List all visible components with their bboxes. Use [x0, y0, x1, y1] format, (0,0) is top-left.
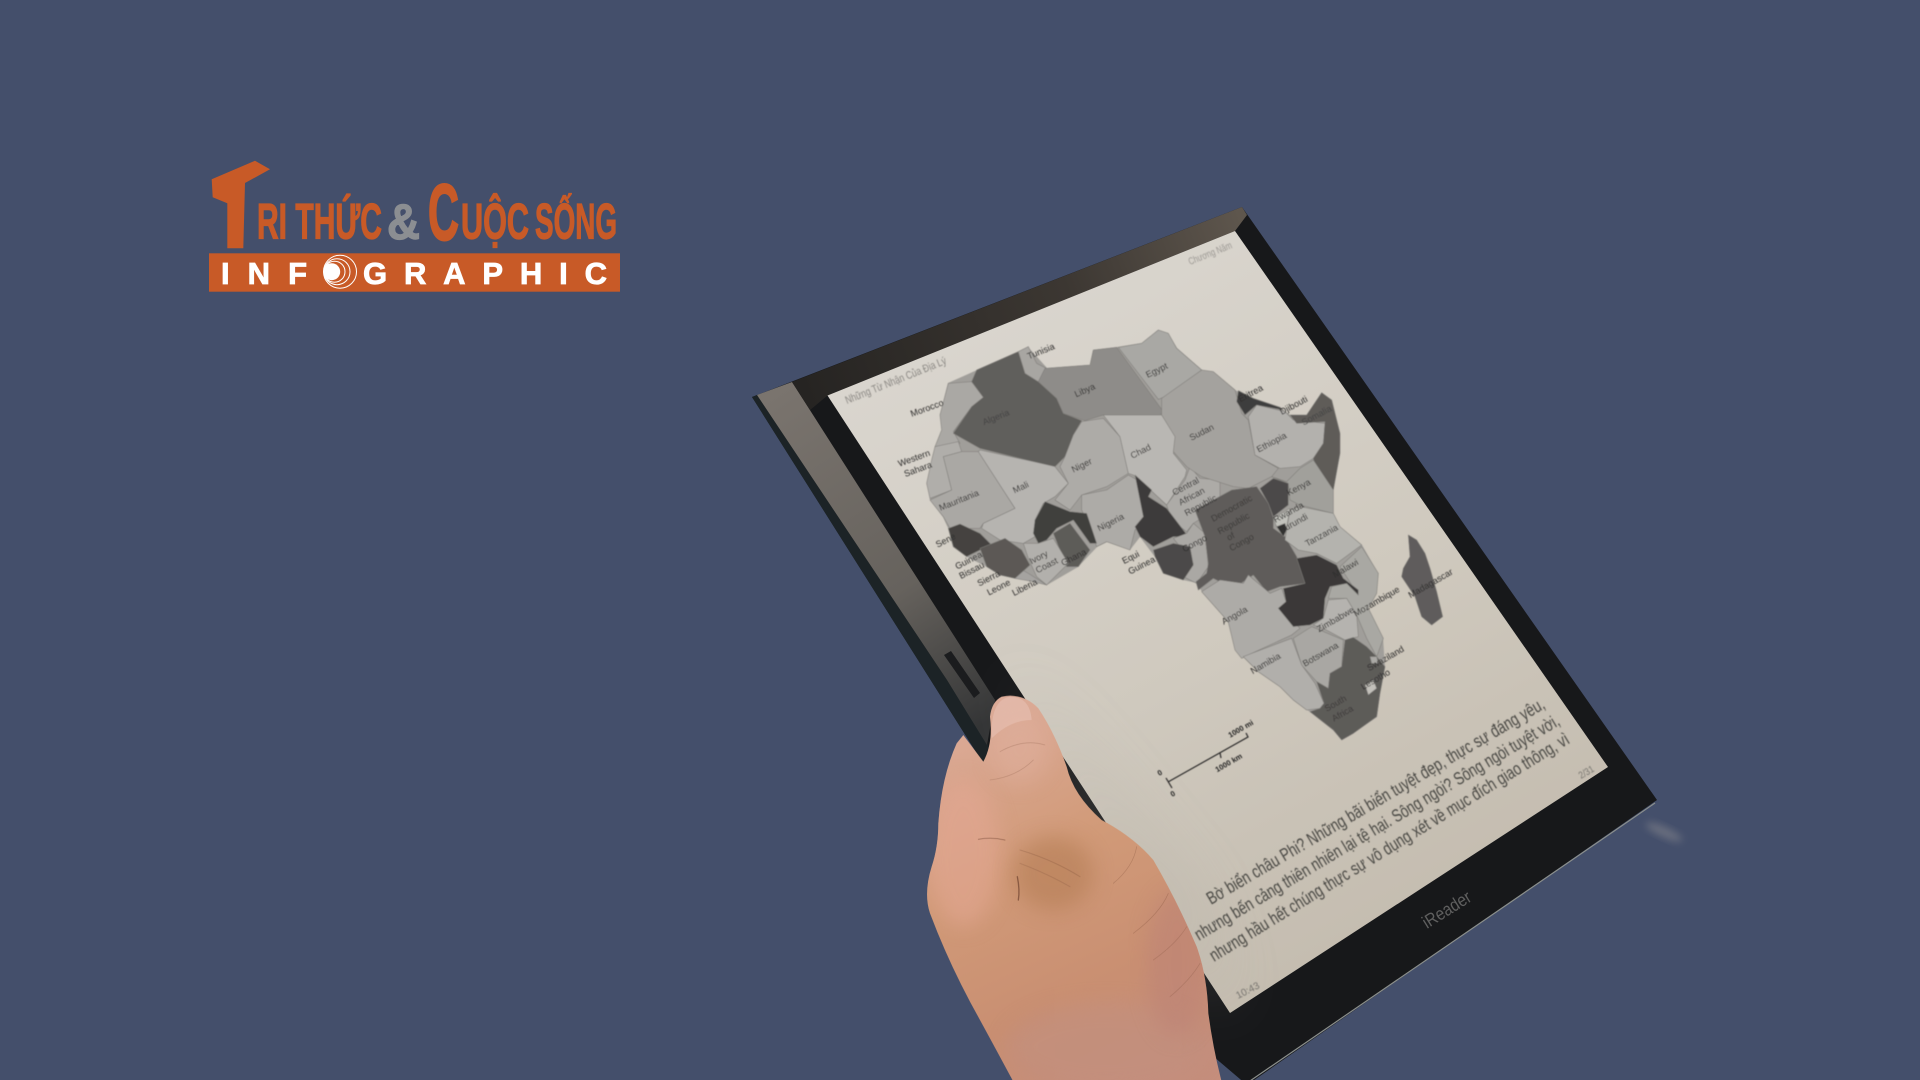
country labels: Western — [897, 448, 931, 469]
country labels: Coast — [1034, 555, 1060, 575]
map scale bar — [1156, 718, 1255, 799]
logo: Tri thức & Cuộc sống Infographic — [209, 161, 620, 292]
page clock: 10:43 — [1234, 980, 1262, 1002]
country labels: Tanzania — [1303, 522, 1340, 548]
skin shading and creases — [927, 696, 1207, 998]
screen — [828, 231, 1608, 1013]
country labels: Africa — [1330, 703, 1355, 723]
side edge — [752, 395, 990, 763]
country labels: Zimbabwe — [1315, 605, 1356, 634]
country labels: Malawi — [1331, 557, 1360, 580]
screen content — [844, 240, 1597, 1002]
country labels: Ethiopia — [1255, 430, 1288, 454]
country labels: Equi — [1120, 549, 1141, 566]
country labels: Sene — [934, 531, 957, 550]
country labels: Bissau — [957, 560, 986, 581]
country labels: Namibia — [1249, 651, 1282, 676]
body line 2: nhưng bến cảng thiên nhiên lại tệ hại. Sông ngòi? Sông ngòi tuyệt vời, — [1191, 711, 1563, 944]
country labels: Congo — [1228, 532, 1256, 553]
country labels: Mozambique — [1352, 584, 1401, 619]
country labels: Somalia — [1300, 403, 1333, 427]
country labels: South — [1323, 693, 1348, 714]
country labels: African — [1177, 485, 1206, 507]
west and north countries — [927, 330, 1220, 585]
country labels: Sierra — [976, 568, 1002, 588]
country labels: Angola — [1220, 604, 1249, 627]
country labels: Central — [1170, 475, 1201, 498]
body line 1: Bờ biển châu Phi? Những bãi biển tuyệt đẹp, thực sự đáng yêu, — [1203, 694, 1548, 908]
e-reader device — [752, 207, 1657, 1080]
country labels: Chad — [1129, 442, 1152, 461]
country labels: Madagascar — [1407, 567, 1454, 600]
icon: logo T mark — [212, 161, 270, 248]
country labels: Libya — [1073, 381, 1097, 399]
top bezel — [792, 207, 1247, 410]
page number: 2/31 — [1577, 764, 1597, 782]
logo text: Tri thức: RI THỨC — [257, 194, 382, 250]
logo banner — [209, 253, 620, 292]
banner text: GRAPHIC: GRAPHIC — [363, 256, 607, 291]
page header left: Những Từ Nhận Của Địa Lý — [844, 355, 949, 407]
country labels: Kenya — [1285, 477, 1312, 498]
icon: concentric O — [323, 255, 356, 288]
page header right: Chương Năm — [1187, 240, 1234, 268]
country labels: Ghana — [1059, 547, 1088, 568]
country labels: Sahara — [903, 460, 933, 479]
country labels: Burundi — [1278, 511, 1310, 535]
country labels: Guinea — [953, 549, 984, 571]
country labels — [897, 341, 1454, 723]
logo text: Cuộc: UỘC — [461, 192, 529, 250]
device body — [752, 207, 1657, 1080]
country labels: Republic — [1183, 492, 1219, 518]
hand holding the device — [927, 696, 1222, 1080]
country labels: Liberia — [1010, 577, 1039, 598]
logo text: big C: C — [428, 168, 459, 256]
country labels: Nigeria — [1096, 511, 1126, 533]
country labels: Algeria — [981, 407, 1011, 427]
country labels: Lesotho — [1359, 667, 1392, 692]
country labels: Egypt — [1144, 361, 1170, 380]
country labels: Eritrea — [1237, 383, 1265, 404]
logo text: sống: SỐNG — [535, 192, 617, 250]
hand silhouette — [927, 696, 1222, 1080]
country labels: Niger — [1070, 456, 1094, 475]
power button — [944, 651, 980, 698]
map scale bar: 0 — [1156, 768, 1164, 778]
map scale bar: 1000 km — [1214, 751, 1244, 774]
country labels: Rwanda — [1272, 500, 1305, 525]
map scale bar: 0 — [1169, 789, 1177, 799]
country labels: Mali — [1011, 479, 1030, 495]
country labels: Botswana — [1301, 640, 1340, 669]
country labels: Djibouti — [1278, 394, 1309, 417]
country labels: Morocco — [909, 398, 945, 419]
map of Africa — [897, 330, 1454, 799]
device bottom edge highlight — [1247, 803, 1655, 1080]
grey grip strip — [757, 382, 995, 745]
country labels: Guinea — [1126, 554, 1157, 576]
thumbnail — [992, 697, 1032, 738]
iReader brand: iReader — [1419, 887, 1475, 932]
country labels: Ivory — [1028, 548, 1050, 566]
screen shaded area near hand — [1005, 668, 1230, 1013]
country labels: Republic — [1216, 510, 1252, 536]
southern countries — [1202, 547, 1385, 740]
country labels: Democratic — [1209, 493, 1254, 524]
banner text: INF: INF — [221, 256, 307, 291]
body line 3: nhưng hầu hết chúng thực sự vô dụng xét về mục đích giao thông, vì — [1206, 729, 1573, 965]
map scale bar: 1000 mi — [1227, 718, 1255, 740]
country labels: Sudan — [1188, 422, 1216, 443]
country labels: Leone — [985, 577, 1012, 597]
country labels: of — [1225, 530, 1237, 543]
country labels: Congo — [1181, 533, 1209, 554]
smudge shadow beside device corner — [1644, 819, 1684, 845]
country labels: Mauritania — [938, 488, 980, 513]
continent base silhouette — [927, 330, 1385, 740]
body text lines — [1191, 694, 1573, 965]
country labels: Tunisia — [1026, 341, 1056, 361]
country labels: Swaziland — [1365, 644, 1406, 673]
logo text: ampersand: & — [387, 194, 420, 250]
east countries — [1162, 370, 1443, 625]
